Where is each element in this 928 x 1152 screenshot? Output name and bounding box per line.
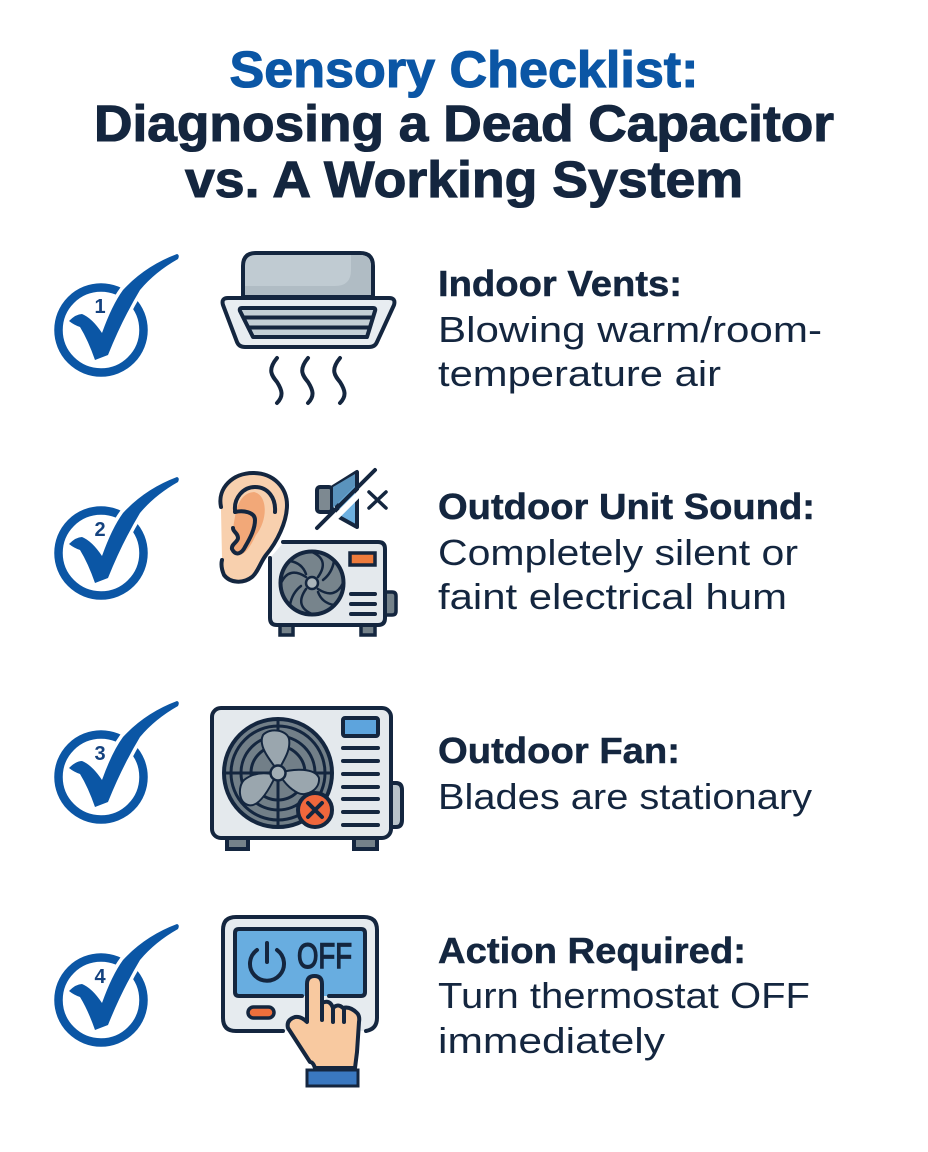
icon: ear, muted speaker and outdoor unit <box>220 470 396 635</box>
check badge 4 <box>58 924 179 1042</box>
checklist row 3: outdoor fan <box>58 701 812 849</box>
icon: error badge <box>298 793 332 827</box>
text: indoor vents <box>438 263 822 394</box>
text: outdoor unit sound: Completely silent or <box>438 532 798 573</box>
text: action required: Turn thermostat OFF <box>438 975 810 1016</box>
text: outdoor unit sound <box>438 486 815 617</box>
check badge 1: 1 <box>94 296 106 318</box>
muted speaker <box>317 470 386 528</box>
icon: ceiling vent blowing air <box>223 253 394 403</box>
text: outdoor fan: Blades are stationary <box>438 776 812 817</box>
text: action required <box>438 930 810 1061</box>
text: outdoor fan: Outdoor Fan: <box>438 730 680 771</box>
title: vs. A Working System <box>185 151 743 208</box>
check badge 2: 2 <box>94 519 106 541</box>
checklist row 1: indoor vents <box>58 253 822 403</box>
check badge 3: 3 <box>94 743 106 765</box>
text: action required: immediately <box>438 1020 665 1061</box>
icon: stationary outdoor fan <box>212 708 402 849</box>
check badge 2 <box>58 477 179 596</box>
checklist row 4: action required <box>58 917 810 1086</box>
outdoor unit <box>270 542 396 635</box>
check badge 4: 4 <box>94 966 106 988</box>
text: action required: Action Required: <box>438 930 746 971</box>
title <box>94 41 834 208</box>
text: outdoor fan <box>438 730 812 817</box>
check badge 3 <box>58 701 179 820</box>
text: outdoor unit sound: faint electrical hum <box>438 576 787 617</box>
check badge 1 <box>58 254 179 372</box>
icon: thermostat with finger pressing off <box>223 917 377 1086</box>
text: indoor vents: Blowing warm/room- <box>438 309 822 350</box>
ear <box>220 473 287 582</box>
text: outdoor unit sound: Outdoor Unit Sound: <box>438 486 815 527</box>
title: Diagnosing a Dead Capacitor <box>94 95 834 152</box>
checklist row 2: outdoor unit sound <box>58 470 815 635</box>
text: indoor vents: temperature air <box>438 353 721 394</box>
title: Sensory Checklist: <box>230 41 698 98</box>
hand <box>288 976 359 1086</box>
icon: thermostat with finger pressing off: OFF <box>297 937 352 976</box>
text: indoor vents: Indoor Vents: <box>438 263 682 304</box>
